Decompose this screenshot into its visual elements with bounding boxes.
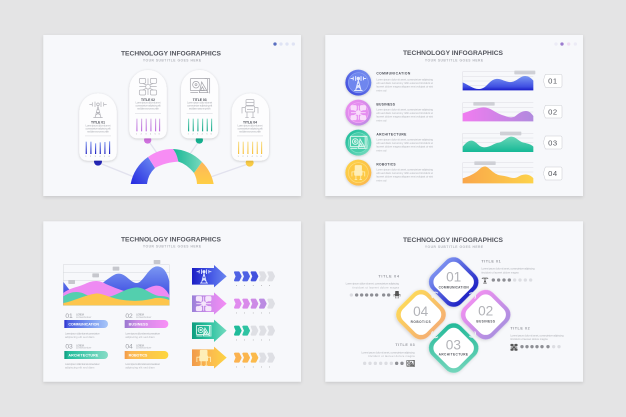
area chart 01 [463, 71, 535, 90]
item 01: 01 [65, 313, 73, 320]
area chart 04 [463, 161, 533, 183]
item 04: Lorem ipsum dolor sit amet consectetuer [125, 362, 160, 366]
diamond 04 [392, 285, 450, 344]
diamond 02: 02 [478, 304, 493, 319]
diamond 03: 03 [446, 338, 461, 353]
page indicator dots [273, 42, 295, 46]
row: robotics: elit sed diam nonummy nibh euismod tincidunt ut [376, 171, 433, 175]
item 03 [64, 343, 108, 370]
area chart 03 [463, 132, 533, 152]
row: communication: COMMUNICATION [376, 72, 411, 76]
card: title 04: sed diam nonummy nibh [239, 129, 261, 133]
item 04: consectetuer [136, 346, 151, 350]
row: robotics: Lorem ipsum dolor sit amet, consectetuer adipiscing [376, 167, 434, 171]
callout: title 04: tincidunt ut laoreet dolore magna [352, 285, 400, 289]
callout: title 01 [481, 260, 535, 283]
callout: title 01: tincidunt ut laoreet dolore magna [481, 270, 519, 274]
card: title 01: Lorem ipsum dolor sit amet [85, 123, 111, 127]
subtitle: YOUR SUBTITLE GOES HERE [425, 245, 484, 249]
number tag 04: 04 [548, 169, 558, 178]
item 01: Lorem ipsum dolor sit amet consectetuer [65, 331, 100, 335]
row: business: enim ad [376, 119, 387, 123]
item 02: BUSINESS [129, 322, 149, 326]
row: robotics: ROBOTICS [376, 162, 396, 166]
card: title 01: sed diam nonummy nibh [87, 129, 109, 133]
diamond 04: ROBOTICS [411, 320, 431, 324]
item 04: 04 [125, 344, 133, 351]
card: title 03: sed diam nonummy nibh [189, 106, 211, 110]
row: communication [345, 70, 434, 96]
item 04: ROBOTICS [129, 353, 148, 357]
item 01: adipiscing elit sed diam [65, 335, 95, 339]
callout: title 03: Lorem ipsum dolor sit amet, consectetuer adipiscing [361, 350, 415, 354]
callout: title 04: TITLE 04 [378, 274, 400, 278]
item 02: consectetuer [136, 315, 151, 319]
panel: area chart list [325, 35, 583, 196]
callout: title 03: TITLE 03 [395, 343, 415, 347]
item 03: adipiscing elit sed diam [65, 366, 95, 370]
arrow row 4 [192, 347, 274, 369]
card: title 01: TITLE 01 [91, 121, 105, 125]
callout: title 03 [361, 343, 415, 367]
callout: title 01: Lorem ipsum dolor sit amet, consectetuer adipiscing [481, 267, 535, 271]
panel: diamond cycle [325, 221, 583, 382]
page indicator dots [554, 42, 577, 46]
card: title 04: 123456 [238, 156, 263, 158]
diamond 03 [424, 319, 483, 377]
area chart 02 [463, 102, 533, 121]
card: title 02 [129, 70, 167, 144]
item 01: consectetuer [76, 315, 91, 319]
card: title 01 [79, 93, 117, 166]
subtitle: YOUR SUBTITLE GOES HERE [425, 58, 484, 62]
diamond 04: 04 [413, 304, 429, 319]
panel: layered chart and arrows [43, 221, 301, 382]
card: title 01: consectetuer adipiscing elit [85, 126, 111, 130]
item 03: Lorem ipsum dolor sit amet consectetuer [65, 362, 100, 366]
panel: hub arc infographic [43, 35, 301, 196]
card: title 02: TITLE 02 [141, 98, 155, 102]
callout: title 02: Lorem ipsum dolor sit amet, consectetuer adipiscing [510, 333, 564, 337]
row: architecture: ARCHITECTURE [376, 132, 407, 136]
item 01: LOREM [76, 313, 85, 317]
row: business: Lorem ipsum dolor sit amet, consectetuer adipiscing [376, 107, 434, 111]
diamond links [432, 292, 476, 338]
row: business: elit sed diam nonummy nibh euismod tincidunt ut [376, 111, 433, 115]
row: communication: elit sed diam nonummy nibh euismod tincidunt ut [376, 81, 433, 85]
item 01: COMMUNICATION [68, 322, 99, 326]
item 04 [125, 343, 168, 370]
arrow row 3: ●●●●● [236, 339, 271, 341]
heading: TECHNOLOGY INFOGRAPHICS [403, 50, 504, 57]
card: title 04: Lorem ipsum dolor sit amet [237, 123, 263, 127]
row: communication: Lorem ipsum dolor sit amet, consectetuer adipiscing [376, 77, 434, 81]
row: architecture: enim ad [376, 149, 387, 153]
diamond 01: 01 [446, 270, 461, 285]
callout: title 02: TITLE 02 [510, 326, 530, 330]
row: architecture: Lorem ipsum dolor sit amet, consectetuer adipiscing [376, 137, 434, 141]
arrow row 2: ●●●●● [236, 312, 271, 314]
card: title 02: Lorem ipsum dolor sit amet [135, 100, 161, 104]
heading: TECHNOLOGY INFOGRAPHICS [403, 237, 504, 244]
row: architecture: laoreet dolore magna aliquam erat volutpat ut wisi [376, 145, 433, 149]
item 03: ARCHITECTURE [68, 353, 99, 357]
row: robotics: laoreet dolore magna aliquam erat volutpat ut wisi [376, 175, 433, 179]
row: communication: enim ad [376, 89, 387, 93]
number tag 02: 02 [548, 107, 557, 116]
card: title 04: TITLE 04 [243, 121, 257, 125]
row: architecture: elit sed diam nonummy nibh euismod tincidunt ut [376, 141, 433, 145]
number tag 01 [543, 74, 562, 87]
semicircular arc chart [131, 149, 214, 184]
item 04: adipiscing elit sed diam [125, 366, 155, 370]
number tag 01: 01 [548, 77, 557, 86]
number tag 03 [543, 136, 562, 149]
diamond 01: COMMUNICATION [439, 285, 469, 289]
item 03: LOREM [76, 343, 85, 347]
row: business [345, 100, 434, 126]
diamond 03: ARCHITECTURE [439, 353, 468, 357]
heading: TECHNOLOGY INFOGRAPHICS [121, 236, 222, 243]
number tag 03: 03 [548, 138, 557, 147]
item 02: adipiscing elit sed diam [125, 335, 155, 339]
card: title 03: 123456 [188, 133, 213, 135]
arrow row 3 [192, 320, 274, 342]
row: communication: laoreet dolore magna aliquam erat volutpat ut wisi [376, 85, 433, 89]
layered area chart [63, 260, 169, 305]
row: robotics [345, 160, 434, 186]
item 02: 02 [125, 313, 133, 320]
card: title 02: 123456 [136, 133, 161, 135]
card: title 03: Lorem ipsum dolor sit amet [187, 100, 212, 104]
card: title 03: TITLE 03 [193, 98, 207, 102]
item 02 [125, 313, 168, 339]
item 02: Lorem ipsum dolor sit amet consectetuer [125, 331, 160, 335]
subtitle: YOUR SUBTITLE GOES HERE [143, 244, 202, 248]
card: title 04 [232, 93, 269, 167]
item 02: LOREM [136, 313, 145, 317]
row: robotics: enim ad [376, 179, 387, 183]
callout: title 02 [510, 326, 564, 350]
number tag 04 [543, 167, 562, 180]
callout: title 01: TITLE 01 [481, 260, 501, 264]
diamond 02 [456, 285, 515, 344]
arrow row 1 [192, 265, 274, 287]
connector lines [98, 141, 250, 177]
card: title 04: consectetuer adipiscing elit [237, 126, 263, 130]
diamond 02: BUSINESS [476, 319, 495, 323]
card: title 02: sed diam nonummy nibh [137, 106, 159, 110]
callout: title 04: Lorem ipsum dolor sit amet, consectetuer adipiscing [346, 282, 400, 286]
card: title 02: consectetuer adipiscing elit [135, 103, 161, 107]
diamond 01 [424, 253, 483, 311]
item 03: consectetuer [76, 346, 91, 350]
row: architecture [345, 130, 434, 156]
subtitle: YOUR SUBTITLE GOES HERE [143, 58, 202, 62]
callout: title 02: tincidunt ut laoreet dolore magna [510, 337, 548, 341]
item 01 [64, 313, 108, 339]
item 04: LOREM [136, 343, 145, 347]
row: business: laoreet dolore magna aliquam erat volutpat ut wisi [376, 115, 433, 119]
card: title 03 [181, 70, 218, 144]
arrow row 1: ●●●●● [236, 285, 271, 287]
card: title 01: 123456 [85, 156, 111, 158]
item 03: 03 [65, 344, 73, 351]
card: title 03: consectetuer adipiscing elit [187, 103, 212, 107]
callout: title 03: tincidunt ut laoreet dolore magna [368, 354, 415, 358]
row: business: BUSINESS [376, 102, 396, 106]
arrow row 4: ●●●●● [236, 366, 271, 368]
arrow row 2 [192, 292, 274, 315]
callout: title 04 [346, 274, 400, 298]
number tag 02 [543, 105, 562, 118]
heading: TECHNOLOGY INFOGRAPHICS [121, 51, 222, 58]
